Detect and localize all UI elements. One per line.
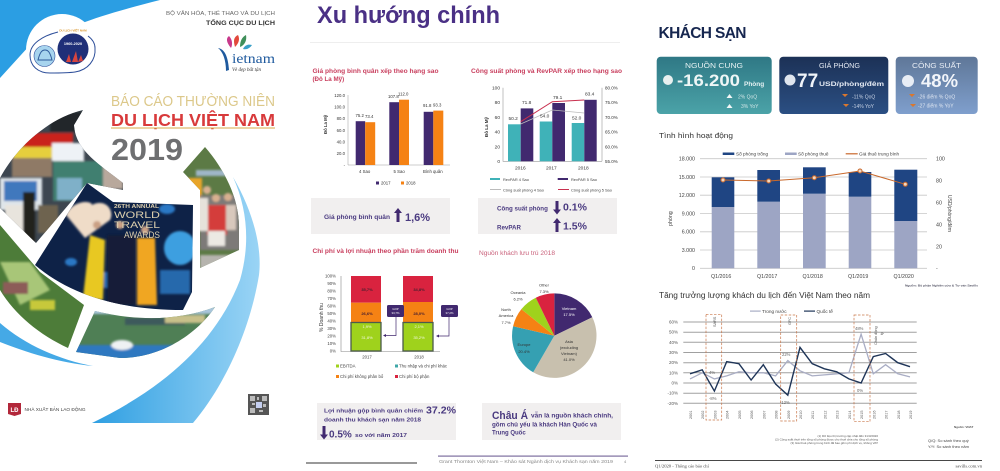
anniversary logo bbox=[26, 14, 98, 86]
photo: travel booth bbox=[0, 105, 125, 250]
chart: cost and profit as share of revenue: 34,8% bbox=[413, 287, 425, 292]
chart: occupancy and RevPAR: 65.0% bbox=[605, 130, 618, 134]
chart: occupancy and RevPAR: 20 bbox=[495, 144, 500, 150]
chart: cost and profit as share of revenue: 10% bbox=[327, 341, 336, 346]
page title: Xu hướng chính bbox=[317, 2, 500, 29]
chart: visitor growth: 60% bbox=[669, 320, 678, 324]
chart: hotel performance: 60 bbox=[936, 200, 942, 206]
chart: cost and profit as share of revenue: Chi phí không phân bổ bbox=[340, 374, 384, 379]
footer: Savills: Q1/2020 - Thông cáo báo chí bbox=[655, 464, 710, 468]
callout: occupancy and RevPAR bbox=[478, 198, 617, 234]
chart: visitor growth: -8% bbox=[709, 396, 717, 401]
chart: visitor growth: 2002 bbox=[701, 411, 705, 419]
chart: occupancy and RevPAR: 60.0% bbox=[605, 144, 618, 150]
chart: average room rate by star rating: 91.8 bbox=[423, 103, 432, 108]
chart: occupancy and RevPAR: RevPAR 5 Sao bbox=[571, 177, 597, 182]
callout: occupancy and RevPAR: 1.5% bbox=[563, 220, 588, 232]
chart heading: Giá phòng bình quân xếp theo hạng sao bbox=[312, 68, 439, 75]
chart: average room rate by star rating: 2018 bbox=[406, 180, 416, 186]
chart: average room rate by star rating: Đô La Mỹ bbox=[323, 114, 328, 134]
chart: visitor growth: 4% bbox=[709, 370, 715, 375]
source and footnotes bbox=[775, 425, 973, 449]
chart: guest source pie: Vietnam bbox=[562, 306, 577, 311]
chart: average room rate by star rating: 4 Sao bbox=[359, 169, 371, 174]
chart: cost and profit as share of revenue bbox=[312, 248, 459, 379]
chart heading: Công suất phòng và RevPAR xếp theo hạng sao bbox=[471, 68, 622, 75]
photo: green resort bbox=[0, 225, 84, 348]
photo: World Travel Awards bbox=[35, 183, 193, 310]
issuer heading: TỔNG CỤC DU LỊCH bbox=[206, 20, 275, 27]
chart: cost and profit as share of revenue: % Doanh thu bbox=[319, 303, 325, 332]
issuer heading bbox=[166, 10, 275, 27]
chart: visitor growth: SARS bbox=[713, 316, 717, 327]
chart: cost and profit as share of revenue: Chi phí bộ phận bbox=[399, 374, 430, 379]
chart: hotel performance: 3.000 bbox=[682, 248, 695, 254]
chart: cost and profit as share of revenue: 0% bbox=[330, 348, 336, 354]
card: supply: 2% QoQ bbox=[738, 94, 757, 100]
chart: cost and profit as share of revenue: 1,9% bbox=[362, 324, 372, 329]
chart: occupancy and RevPAR: Công suất phòng 4 Sao bbox=[503, 188, 544, 192]
chart: hotel performance: Q1/2017 bbox=[757, 274, 777, 280]
chart: occupancy and RevPAR: 60 bbox=[495, 115, 500, 121]
chart: occupancy and RevPAR: 0 bbox=[497, 159, 500, 165]
GOP callouts: GOP bbox=[446, 307, 453, 311]
chart: hotel performance: - bbox=[936, 266, 938, 272]
chart: average room rate by star rating bbox=[312, 68, 450, 186]
chart: average room rate by star rating: - bbox=[344, 163, 346, 168]
chart: occupancy and RevPAR: 54.0 bbox=[540, 114, 550, 120]
award caption bbox=[114, 204, 160, 241]
chart heading: Chi phí và lợi nhuận theo phần trăm doanh thu bbox=[312, 248, 459, 255]
chart: hotel performance: Q1/2020 bbox=[894, 274, 914, 280]
blue left swoosh bbox=[0, 323, 93, 366]
chart: visitor growth: 2004 bbox=[726, 411, 730, 419]
award caption: 26TH ANNUAL bbox=[114, 204, 159, 210]
chart: visitor growth: GFC bbox=[788, 317, 792, 325]
chart: cost and profit as share of revenue: 2018 bbox=[414, 354, 424, 360]
chart: average room rate by star rating: 20.0 bbox=[337, 151, 346, 156]
chart: average room rate by star rating: 107.8 bbox=[388, 94, 399, 99]
Vietnam tourism logo: ietnam bbox=[232, 52, 275, 67]
callout: Asia guest source: Châu Á bbox=[492, 409, 528, 422]
chart: hotel performance: Nguồn: Bộ phận Nghiên cứu & Tư vấn Savills bbox=[905, 284, 978, 288]
chart: hotel performance: 0 bbox=[692, 266, 695, 272]
chart: occupancy and RevPAR: 2016 bbox=[515, 166, 526, 172]
chart: guest source pie: Europe bbox=[518, 342, 531, 347]
chart: cost and profit as share of revenue: 28,0% bbox=[413, 311, 425, 316]
chart: guest source pie: Oceania bbox=[511, 290, 526, 295]
callout: gross profit: 37.2% bbox=[426, 406, 456, 416]
chart: visitor growth: tỷ bbox=[880, 332, 884, 335]
publisher: NHÀ XUẤT BẢN LAO ĐỘNG bbox=[24, 406, 86, 412]
chart: visitor growth: -20% bbox=[667, 401, 678, 406]
card: occupancy: CÔNG SUẤT bbox=[912, 60, 962, 70]
report title: 2019 bbox=[111, 132, 183, 167]
chart: visitor growth: 2009 bbox=[787, 411, 791, 419]
chart: visitor growth: 2001 bbox=[689, 411, 693, 419]
chart: cost and profit as share of revenue: 100% bbox=[325, 274, 336, 278]
chart: average room rate by star rating: 100.0 bbox=[334, 104, 346, 110]
chart: hotel performance: 15.000 bbox=[679, 175, 695, 181]
chart: visitor growth: 0% bbox=[671, 380, 678, 386]
card: room rate: 77 bbox=[797, 71, 818, 92]
chart: occupancy and RevPAR: 80.0% bbox=[605, 86, 618, 90]
source and footnotes: Y/Y: So sánh theo năm bbox=[928, 444, 970, 449]
chart: cost and profit as share of revenue: Thu nhập và chi phí khác bbox=[399, 364, 448, 369]
chart: occupancy and RevPAR: 70.0% bbox=[605, 115, 618, 120]
chart: occupancy and RevPAR: Công suất phòng 5 Sao bbox=[571, 188, 612, 192]
chart: cost and profit as share of revenue: 35,2% bbox=[413, 335, 425, 340]
footer: Grant Thornton: Grant Thornton Việt Nam – Khảo sát Ngành dịch vụ Khách sạn năm 2019 bbox=[439, 459, 614, 464]
chart: hotel performance: USD/phòng/đêm bbox=[946, 195, 952, 232]
footer: Grant Thornton: 4 bbox=[624, 459, 627, 464]
card: supply bbox=[657, 57, 772, 114]
QR code bbox=[248, 394, 269, 415]
photo: tourists bbox=[183, 147, 240, 268]
chart: visitor growth: 2015 bbox=[860, 411, 864, 419]
chart: visitor growth: 2003 bbox=[713, 411, 717, 419]
chart: hotel performance: Giá thuê trung bình bbox=[859, 152, 900, 156]
GOP callouts: 37,2% bbox=[446, 311, 454, 315]
chart: hotel performance: 12.000 bbox=[679, 193, 695, 199]
chart: visitor growth: 2019 bbox=[909, 411, 913, 419]
chart: cost and profit as share of revenue: 50% bbox=[327, 311, 336, 316]
chart: visitor growth: 2017 bbox=[885, 411, 889, 419]
source and footnotes: Nguồn: VNAT bbox=[954, 425, 973, 429]
chart: average room rate by star rating: 2017 bbox=[381, 180, 391, 186]
chart: hotel performance: Q1/2018 bbox=[802, 274, 823, 280]
chart: cost and profit as share of revenue: 2017 bbox=[362, 354, 372, 360]
chart: guest source pie bbox=[479, 251, 597, 378]
footer: Savills: savills.com.vn bbox=[955, 464, 983, 468]
chart: average room rate by star rating: 40.0 bbox=[337, 140, 346, 144]
chart: average room rate by star rating: 60.0 bbox=[337, 128, 346, 133]
chart: cost and profit as share of revenue: 20% bbox=[327, 334, 336, 338]
chart: visitor growth: 2013 bbox=[836, 411, 840, 419]
chart: visitor growth: 2018 bbox=[897, 411, 901, 419]
chart: guest source pie: Vietnam) bbox=[561, 351, 578, 356]
blue right swoosh bbox=[92, 177, 260, 423]
chart: hotel performance: 100 bbox=[936, 156, 945, 162]
award caption: WORLD bbox=[114, 210, 160, 221]
chart: visitor growth: 0% bbox=[857, 388, 863, 393]
chart: visitor growth: -12% bbox=[780, 400, 790, 405]
card: room rate bbox=[779, 57, 888, 114]
chart: guest source pie: Other bbox=[539, 282, 550, 288]
chart: visitor growth bbox=[659, 291, 917, 422]
chart: guest source pie: 6.2% bbox=[513, 296, 523, 302]
callout: occupancy and RevPAR: RevPAR bbox=[497, 224, 521, 232]
chart: cost and profit as share of revenue: 60% bbox=[327, 304, 336, 308]
card: supply: -16.200 bbox=[677, 71, 740, 90]
GOP callouts bbox=[383, 305, 458, 338]
anniversary logo: 1960-2020 bbox=[64, 42, 82, 46]
card: room rate: GIÁ PHÒNG bbox=[819, 61, 860, 70]
footer: Grant Thornton bbox=[306, 456, 628, 464]
chart: occupancy and RevPAR: 80 bbox=[495, 100, 500, 106]
chart: occupancy and RevPAR: Đô La Mỹ bbox=[484, 117, 489, 137]
chart: visitor growth: 10% bbox=[669, 370, 678, 375]
chart heading: Nguồn khách lưu trú 2018 bbox=[479, 251, 556, 257]
anniversary logo: DU LỊCH VIỆT NAM bbox=[59, 28, 87, 32]
chart: hotel performance: 18.000 bbox=[679, 156, 695, 162]
chart: visitor growth: 2012 bbox=[823, 411, 827, 419]
chart: average room rate by star rating: 5 Sao bbox=[394, 169, 405, 174]
chart: visitor growth: 2016 bbox=[872, 411, 876, 419]
chart: occupancy and RevPAR: 2018 bbox=[578, 166, 589, 172]
chart: occupancy and RevPAR: 71.8 bbox=[522, 100, 532, 106]
chart: guest source pie: 7.7% bbox=[501, 320, 511, 325]
callout: Asia guest source: vẫn là nguồn khách chính, bbox=[531, 412, 613, 420]
card: room rate: -14% YoY bbox=[852, 104, 875, 110]
footer: Savills bbox=[655, 460, 983, 468]
panel: hotel market bbox=[655, 25, 983, 468]
chart: average room rate by star rating: 73.4 bbox=[365, 114, 374, 119]
chart: cost and profit as share of revenue: 2,1% bbox=[414, 324, 424, 329]
chart: guest source pie: Asia bbox=[565, 339, 574, 344]
chart: visitor growth: 2005 bbox=[738, 411, 742, 419]
callout: occupancy and RevPAR: Công suất phòng bbox=[497, 206, 548, 212]
chart: cost and profit as share of revenue: EBITDA bbox=[340, 364, 356, 369]
chart: occupancy and RevPAR: 100 bbox=[492, 86, 500, 92]
source and footnotes: Q/Q: So sánh theo quý bbox=[928, 438, 969, 443]
chart heading: Tăng trưởng lượng khách du lịch đến Việt Nam theo năm bbox=[659, 291, 870, 300]
callout: occupancy and RevPAR: 0.1% bbox=[563, 202, 588, 214]
callout: Asia guest source: gồm chủ yếu là khách Hàn Quốc và bbox=[492, 422, 598, 428]
chart: cost and profit as share of revenue: 35,7% bbox=[361, 287, 373, 292]
panel: main trends bbox=[306, 2, 628, 464]
card: supply: Phòng bbox=[744, 81, 764, 88]
chart: hotel performance: 9.000 bbox=[682, 212, 695, 218]
chart: cost and profit as share of revenue: 70% bbox=[327, 296, 336, 301]
chart: occupancy and RevPAR: 55.0% bbox=[605, 159, 618, 164]
chart: visitor growth: 20% bbox=[669, 360, 678, 365]
chart: visitor growth: 48% bbox=[855, 326, 864, 331]
chart: guest source pie: 17.5% bbox=[563, 312, 575, 317]
chart heading: (Đô La Mỹ) bbox=[312, 76, 344, 83]
chart: hotel performance: Q1/2019 bbox=[848, 274, 868, 280]
award caption: TRAVEL bbox=[114, 220, 160, 231]
chart: cost and profit as share of revenue: 31,8% bbox=[361, 335, 373, 340]
chart: visitor growth: Quốc tế bbox=[816, 309, 833, 314]
chart: hotel performance: Q1/2016 bbox=[711, 274, 731, 280]
Vietnam tourism logo bbox=[218, 35, 275, 73]
callout: gross profit: Lợi nhuận gộp bình quân chiếm bbox=[324, 408, 423, 415]
chart: occupancy and RevPAR: 75.0% bbox=[605, 100, 618, 105]
chart: hotel performance: Số phòng thuê bbox=[798, 152, 829, 156]
chart: occupancy and RevPAR: 2017 bbox=[546, 166, 557, 172]
chart: visitor growth: 2008 bbox=[775, 411, 779, 419]
chart: visitor growth: Chấn động bbox=[874, 326, 878, 345]
chart: guest source pie: 20.4% bbox=[518, 349, 530, 354]
publisher: LĐ bbox=[10, 408, 19, 414]
chart: visitor growth: 22% bbox=[782, 352, 791, 357]
chart: visitor growth: 50% bbox=[669, 330, 678, 335]
blue corner swoosh bbox=[0, 0, 160, 78]
chart: hotel performance: 20 bbox=[936, 244, 942, 250]
card: supply: 3% YoY bbox=[741, 104, 759, 110]
chart: visitor growth: Trong nước bbox=[762, 309, 787, 314]
card: occupancy bbox=[896, 57, 978, 114]
chart: average room rate by star rating: Bình quân bbox=[423, 169, 443, 174]
chart: visitor growth: 2011 bbox=[811, 411, 815, 419]
chart: visitor growth: 30% bbox=[669, 350, 678, 355]
source and footnotes: (2) Công suất thuê trên tổng số phòng được cho thuê chia cho tổng số phòng bbox=[775, 438, 878, 442]
chart: occupancy and RevPAR bbox=[471, 68, 622, 192]
callout: room rate: Giá phòng bình quân bbox=[324, 214, 390, 221]
chart: visitor growth: 2014 bbox=[848, 411, 852, 419]
chart: cost and profit as share of revenue: 30% bbox=[327, 326, 336, 331]
chart: guest source pie: North bbox=[501, 307, 511, 312]
chart: occupancy and RevPAR: 52.0 bbox=[572, 116, 582, 122]
chart: guest source pie: America bbox=[499, 313, 514, 318]
chart: average room rate by star rating: 93.3 bbox=[433, 102, 442, 108]
Vietnam tourism logo: Vẻ đẹp bất tận bbox=[232, 68, 262, 73]
chart: occupancy and RevPAR: 40 bbox=[495, 130, 500, 136]
chart: visitor growth: -10% bbox=[667, 391, 678, 396]
chart: cost and profit as share of revenue: 26,6% bbox=[361, 311, 373, 316]
chart: hotel performance: phòng bbox=[668, 211, 674, 226]
GOP callouts: 33,7% bbox=[392, 311, 400, 315]
report title: BÁO CÁO THƯỜNG NIÊN bbox=[111, 93, 275, 110]
chart: hotel performance: 80 bbox=[936, 178, 942, 184]
page title: KHÁCH SẠN bbox=[658, 25, 746, 42]
panel: report cover bbox=[0, 0, 275, 423]
card: room rate: -11% QoQ bbox=[852, 94, 875, 100]
chart: average room rate by star rating: 75.2 bbox=[356, 113, 364, 118]
source and footnotes: (3) Giá thuê phòng trung bình đã bao gồm phí dịch vụ, không VAT bbox=[791, 441, 878, 445]
chart: guest source pie: (excluding bbox=[560, 345, 578, 350]
chart: visitor growth: 2006 bbox=[750, 411, 754, 419]
card: occupancy: -26 điểm % QoQ bbox=[918, 94, 955, 100]
chart: average room rate by star rating: 120.0 bbox=[334, 93, 346, 98]
chart: cost and profit as share of revenue: 40% bbox=[327, 318, 336, 324]
chart: occupancy and RevPAR: 83.4 bbox=[585, 92, 595, 98]
report title bbox=[111, 93, 275, 167]
chart: average room rate by star rating: 80.0 bbox=[337, 116, 346, 121]
publisher bbox=[8, 403, 86, 416]
chart: hotel performance: 6.000 bbox=[682, 230, 695, 236]
callout: Asia guest source bbox=[482, 403, 621, 440]
card: occupancy: -27 điểm % YoY bbox=[918, 102, 954, 110]
chart: cost and profit as share of revenue: 90% bbox=[327, 281, 336, 286]
chart: visitor growth: 40% bbox=[669, 340, 678, 345]
issuer heading: BỘ VĂN HÓA, THỂ THAO VÀ DU LỊCH bbox=[166, 10, 275, 17]
callout: room rate: 1,6% bbox=[405, 212, 430, 224]
card: room rate: USD/phòng/đêm bbox=[819, 81, 884, 88]
report title: DU LỊCH VIỆT NAM bbox=[111, 109, 275, 130]
chart: hotel performance: Số phòng trống bbox=[736, 152, 768, 156]
chart: occupancy and RevPAR: 79.1 bbox=[553, 95, 563, 101]
chart: average room rate by star rating: 112.0 bbox=[398, 92, 409, 96]
chart: visitor growth: 2007 bbox=[762, 411, 766, 419]
callout: gross profit: so với năm 2017 bbox=[355, 433, 408, 439]
chart heading: Tình hình hoạt động bbox=[659, 131, 733, 140]
callout: gross profit: doanh thu khách sạn năm 2018 bbox=[324, 418, 422, 424]
callout: gross profit bbox=[317, 403, 456, 440]
card: occupancy: 48% bbox=[921, 70, 958, 91]
GOP callouts: GOP bbox=[392, 307, 399, 311]
award caption: AWARDS bbox=[124, 230, 160, 241]
source and footnotes: (1) Dữ liệu thị trường cập nhật đến 31/3/2020 bbox=[817, 434, 878, 438]
chart heading bbox=[312, 68, 439, 83]
chart: guest source pie: 41.0% bbox=[563, 357, 575, 362]
chart: occupancy and RevPAR: RevPAR 4 Sao bbox=[503, 177, 529, 182]
card: supply: NGUỒN CUNG bbox=[685, 60, 743, 70]
chart: visitor growth: 2010 bbox=[799, 411, 803, 419]
callout: Asia guest source: Trung Quốc bbox=[492, 430, 526, 436]
callout: gross profit: 0.5% bbox=[329, 430, 352, 440]
chart: hotel performance bbox=[659, 131, 978, 288]
chart: guest source pie: 7.3% bbox=[539, 289, 549, 294]
chart: cost and profit as share of revenue: 80% bbox=[327, 288, 336, 294]
callout: room rate bbox=[311, 198, 450, 234]
chart: occupancy and RevPAR: 50.2 bbox=[508, 116, 518, 122]
photo: beach resort bbox=[76, 307, 215, 358]
chart: hotel performance: 40 bbox=[936, 222, 942, 228]
